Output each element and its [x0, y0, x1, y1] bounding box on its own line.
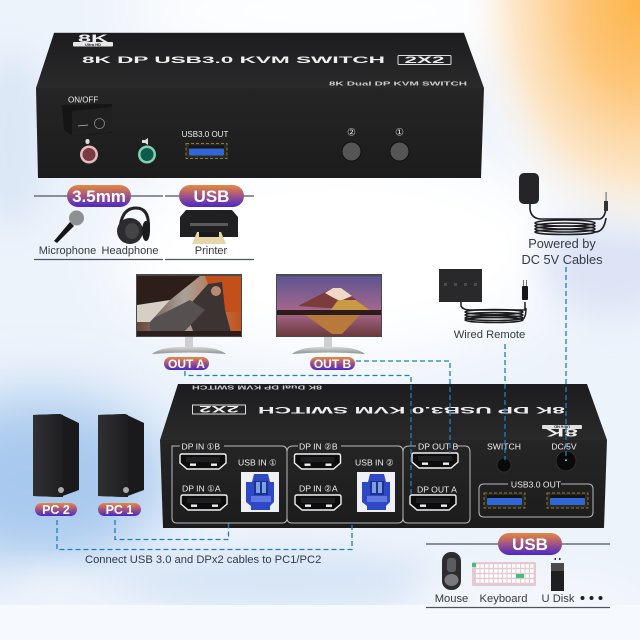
- 8K Ultra HD logo: [73, 33, 113, 47]
- USB3.0 out port: [182, 130, 228, 158]
- USB pill: USB: [512, 535, 548, 554]
- PC 1 tower: [98, 414, 144, 497]
- title upside down: 8K DP USB3.0 KVM SWITCH: [258, 404, 565, 415]
- 2X2 badge upside down: 2X2: [199, 404, 239, 414]
- label: DP OUT A: DP OUT A: [417, 484, 457, 494]
- 2X2 badge upside down: [192, 404, 246, 414]
- DP port IN 1 B: [180, 454, 226, 469]
- 3.5mm and USB device group: [34, 185, 254, 260]
- icon: keyboard: [472, 562, 536, 586]
- front face of switch: [36, 88, 484, 178]
- divider rules: [426, 544, 610, 608]
- icon: microphone: [54, 210, 84, 243]
- DP port OUT A: [410, 495, 456, 510]
- label: USB IN 2: USB IN ②: [355, 458, 394, 468]
- microphone jack: [80, 139, 98, 164]
- adapter cable coil: [530, 204, 606, 234]
- pill: PC 2: PC 2: [42, 503, 70, 517]
- top face of switch: [36, 32, 484, 88]
- 8K logo upside down: [542, 424, 582, 438]
- DP port IN 2 B: [294, 454, 340, 469]
- label: Headphone: Headphone: [102, 245, 158, 257]
- pill: OUT A: OUT A: [168, 357, 205, 371]
- USB3.0 out ports: [484, 480, 588, 508]
- switch jack: SWITCH: [487, 442, 521, 452]
- label: Printer: Printer: [195, 245, 228, 257]
- port group: DP outputs: [410, 442, 459, 510]
- bottom device: KVM switch rear view: [160, 384, 607, 528]
- 3.5mm pill: 3.5mm: [72, 187, 126, 206]
- input select button 2: ②: [347, 128, 356, 138]
- USB3.0 out ports: USB3.0 OUT: [511, 480, 562, 490]
- 2X2 badge: 2X2: [404, 55, 444, 65]
- label: Mouse: Mouse: [435, 593, 468, 605]
- power rocker switch: [62, 96, 112, 136]
- input select button 1: ①: [395, 128, 404, 138]
- remote plug: [522, 280, 528, 300]
- USB pill: USB: [194, 187, 229, 206]
- USB-B port 2: [357, 472, 395, 512]
- monitor: OUT A: [136, 274, 242, 354]
- dashed connection lines: [57, 267, 566, 550]
- wired remote: [439, 269, 528, 322]
- pill: PC 1: PC 1: [106, 503, 133, 517]
- icon: printer: [180, 210, 238, 244]
- switch jack: [487, 442, 521, 472]
- input select button 2: [342, 128, 361, 161]
- icon: headphone: [117, 208, 150, 244]
- power adapter: [519, 173, 608, 234]
- DC 5V jack: [551, 442, 577, 471]
- 8K logo upside down: 8K: [546, 426, 578, 438]
- DC plug: [604, 192, 608, 211]
- icon: mouse: [442, 552, 461, 590]
- divider rules: [34, 196, 254, 260]
- icon: U disk: [551, 558, 564, 591]
- label: Powered by DC 5V Cables: Powered by: [528, 236, 596, 251]
- 8K logo upside down: Ultra HD: [554, 424, 570, 430]
- adapter body: [519, 173, 539, 204]
- DP port OUT B: [412, 453, 458, 468]
- remote cable coil: [461, 301, 526, 322]
- label: USB IN 1: USB IN ①: [238, 458, 277, 468]
- USB peripherals group: [426, 533, 610, 608]
- label: Wired Remote: Wired Remote: [454, 329, 525, 341]
- port group: PC 1 inputs: [180, 442, 279, 512]
- top device: KVM switch front view: [36, 32, 484, 178]
- port group: PC 2 inputs: [294, 442, 395, 512]
- 2X2 badge: [398, 55, 451, 65]
- headphone jack: [138, 138, 156, 164]
- label: DP IN 2 A: DP IN ②A: [299, 484, 338, 494]
- subtitle upside down: 8K Dual DP KVM SWITCH: [192, 384, 322, 390]
- USB pill: [498, 533, 562, 555]
- label: DP OUT B: DP OUT B: [418, 442, 459, 452]
- DP port IN 2 A: [295, 495, 341, 510]
- remote box: [439, 269, 482, 302]
- PC 2 tower: [33, 414, 79, 497]
- pill: OUT B: OUT B: [314, 357, 351, 371]
- label: Keyboard: Keyboard: [480, 593, 527, 605]
- USB3.0 out port: USB3.0 OUT: [182, 130, 228, 139]
- input select button 1: [390, 128, 409, 161]
- label: DP IN 1 B: DP IN ①B: [182, 442, 220, 452]
- pill: PC 2: [35, 503, 77, 517]
- monitor: OUT B: [276, 274, 382, 354]
- power rocker switch: ON/OFF: [68, 96, 98, 104]
- label: Microphone: Microphone: [39, 245, 96, 257]
- rear face: [160, 440, 607, 528]
- subtitle on top face: 8K Dual DP KVM SWITCH: [329, 82, 467, 88]
- label: DP IN 1 A: DP IN ①A: [182, 484, 221, 494]
- more dots: [580, 596, 602, 600]
- label: Powered by DC 5V Cables: DC 5V Cables: [521, 252, 603, 267]
- label: U Disk: U Disk: [542, 593, 575, 605]
- 8K Ultra HD logo: 8K: [78, 33, 108, 45]
- rear top face: [160, 384, 607, 440]
- pill: PC 1: [98, 503, 141, 517]
- DC 5V jack: DC/5V: [551, 442, 577, 452]
- 8K Ultra HD logo: Ultra HD: [85, 42, 101, 47]
- DP port IN 1 A: [181, 495, 227, 510]
- USB pill: [179, 185, 244, 207]
- product title on top face: 8K DP USB3.0 KVM SWITCH: [82, 55, 385, 66]
- port frames: [172, 446, 593, 523]
- label: connect cables: Connect USB 3.0 and DPx2 cables to PC1/PC2: [85, 554, 321, 566]
- USB-B port 1: [241, 472, 279, 512]
- label: DP IN 2 B: DP IN ②B: [299, 442, 338, 452]
